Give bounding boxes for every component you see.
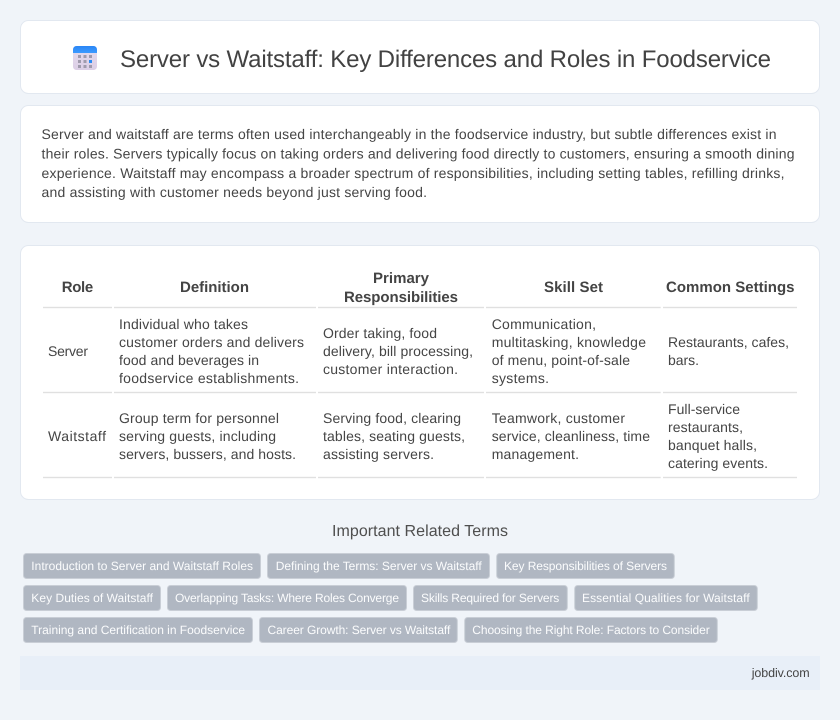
table row: Server: Restaurants, cafes,: [668, 334, 789, 350]
table row: Server: foodservice establishments.: [119, 370, 299, 386]
table row: Waitstaff: banquet halls,: [668, 437, 757, 453]
table header row: Skill Set: [544, 279, 603, 296]
tag: [414, 586, 567, 610]
tag: Defining the Terms: Server vs Waitstaff: [276, 559, 482, 573]
tag: [497, 554, 674, 578]
table row: Server: Server: [48, 343, 88, 359]
panel: comparison table: [20, 246, 820, 500]
tag: [168, 586, 406, 610]
tag: [24, 618, 252, 642]
table row: Waitstaff: service, cleanliness, time: [492, 428, 650, 444]
table row: Waitstaff: catering events.: [668, 455, 768, 471]
intro paragraph: their roles. Servers typically focus on taking orders and delivering food directly to customers, ensuring a smooth dining: [42, 146, 794, 162]
table row: Server: delivery, bill processing,: [323, 343, 473, 359]
intro paragraph: and assisting with customer needs beyond just serving food.: [42, 184, 427, 200]
table row: Waitstaff: Waitstaff: [48, 428, 106, 444]
table row: Waitstaff: assisting servers.: [323, 446, 434, 462]
table row: Server: multitasking, knowledge: [492, 334, 646, 350]
table row: Waitstaff: serving guests, including: [119, 428, 276, 444]
table row: Waitstaff: [48, 401, 768, 471]
intro paragraph: experience. Waitstaff may encompass a broader spectrum of responsibilities, including setting tables, refilling drinks,: [42, 165, 784, 181]
tag: Introduction to Server and Waitstaff Roles: [31, 559, 253, 573]
table row: Server: Individual who takes: [119, 316, 248, 332]
table row: Waitstaff: management.: [492, 446, 579, 462]
icon: calendar: [73, 46, 97, 70]
table row: Server: [48, 316, 789, 386]
table row: Server: systems.: [492, 370, 549, 386]
tag: Key Duties of Waitstaff: [31, 591, 154, 605]
tag: Choosing the Right Role: Factors to Consider: [472, 623, 710, 637]
tag: Training and Certification in Foodservice: [31, 623, 245, 637]
table row: Server: customer interaction.: [323, 361, 458, 377]
tag: [260, 618, 457, 642]
table row: Server: customer orders and delivers: [119, 334, 304, 350]
tag: Overlapping Tasks: Where Roles Converge: [175, 591, 399, 605]
table header row: Primary: [373, 270, 430, 287]
footer source: jobdiv.com: [751, 666, 810, 680]
table row: Server: bars.: [668, 352, 699, 368]
tag: [268, 554, 490, 578]
table row: Waitstaff: Full-service: [668, 401, 740, 417]
panel: introduction: [20, 106, 820, 222]
table header row: Common Settings: [666, 279, 794, 296]
table row: Waitstaff: servers, bussers, and hosts.: [119, 446, 296, 462]
table row: Waitstaff: Serving food, clearing: [323, 410, 461, 426]
related term tags: [24, 554, 757, 642]
intro paragraph: Server and waitstaff are terms often used interchangeably in the foodservice industry, but subtle differences exist in: [42, 126, 776, 142]
panel: header: [20, 20, 820, 94]
table row: Waitstaff: tables, seating guests,: [323, 428, 465, 444]
table row: Server: Order taking, food: [323, 325, 437, 341]
tag: Career Growth: Server vs Waitstaff: [268, 623, 451, 637]
intro paragraph: [42, 126, 794, 200]
tag: [24, 586, 160, 610]
table row: Server: Communication,: [492, 316, 596, 332]
table header row: Role: [62, 279, 93, 296]
table row: Server: food and beverages in: [119, 352, 259, 368]
footer bar: [20, 656, 820, 690]
table header row: Definition: [180, 279, 249, 296]
tag: Essential Qualities for Waitstaff: [582, 591, 750, 605]
table row: Waitstaff: Teamwork, customer: [492, 410, 625, 426]
tag: [465, 618, 717, 642]
tag: [24, 554, 260, 578]
table row: Server: of menu, point-of-sale: [492, 352, 630, 368]
tag: Key Responsibilities of Servers: [504, 559, 667, 573]
title: Server vs Waitstaff: Key Differences and Roles in Foodservice: [120, 46, 771, 73]
table row: Waitstaff: Group term for personnel: [119, 410, 279, 426]
table row: Waitstaff: restaurants,: [668, 419, 743, 435]
heading: related terms: Important Related Terms: [332, 523, 508, 540]
table header row: [62, 270, 794, 306]
tag: [575, 586, 757, 610]
table header row: Responsibilities: [344, 289, 458, 306]
tag: Skills Required for Servers: [421, 591, 559, 605]
